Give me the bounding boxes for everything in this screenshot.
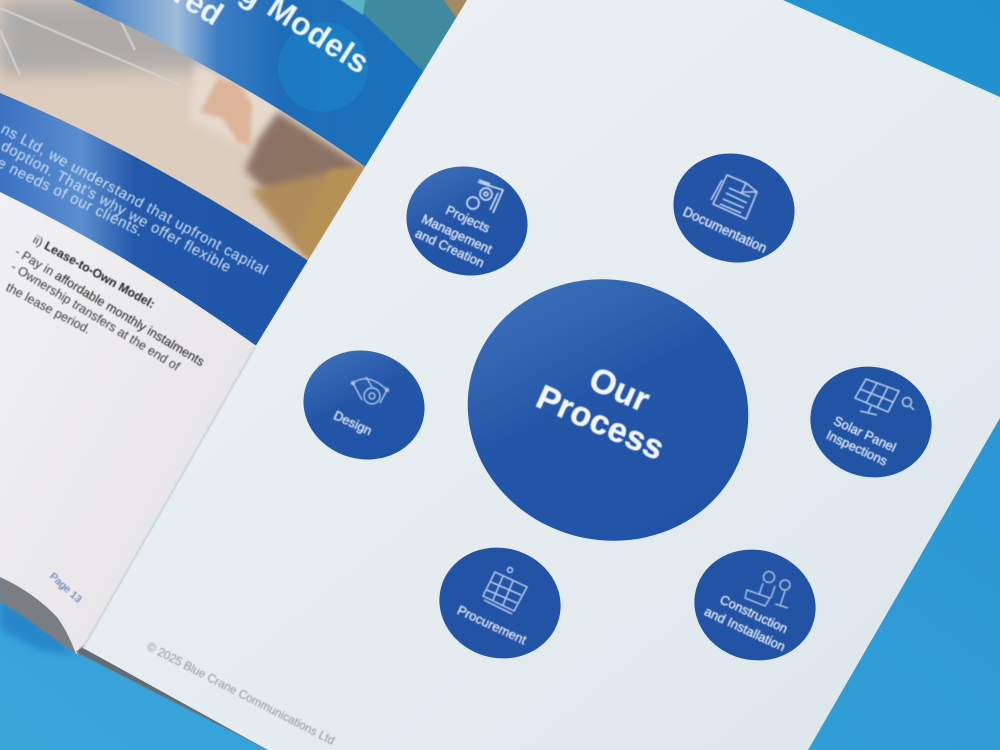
copyright line: © 2025 Blue Crane Communications Ltd <box>145 640 337 748</box>
circle: Construction and Installation <box>682 536 828 674</box>
lease-to-own list: - Pay in affordable monthly instalments <box>12 245 207 369</box>
circle: Design <box>291 337 437 473</box>
icon: gears and ruler <box>467 180 503 213</box>
label: Projects <box>443 202 493 236</box>
circle: Procurement <box>427 534 573 672</box>
lower blue band <box>0 93 310 347</box>
label <box>824 413 899 469</box>
icon: vector node <box>352 377 388 404</box>
white shirt cuff <box>192 61 278 141</box>
shadow under the left page <box>0 600 75 655</box>
icon: checklist and cart <box>483 568 527 614</box>
label: and Creation <box>413 225 487 270</box>
spine line <box>83 347 255 648</box>
circle: Documentation <box>661 140 807 276</box>
photo strip <box>0 0 366 260</box>
handshake <box>200 78 252 147</box>
label: and Installation <box>702 604 788 654</box>
central circle: Our Process <box>438 248 778 572</box>
top blue banner <box>73 0 467 167</box>
icon: document <box>711 175 757 219</box>
circle: Solar Panel Inspections <box>798 353 944 491</box>
page edge stack <box>0 577 78 655</box>
intro paragraph: doption. That's why we offer flexible <box>0 138 234 276</box>
banner heading <box>168 0 376 81</box>
page thickness shadow <box>76 645 288 750</box>
label: Construction <box>718 592 790 636</box>
teal overlay shapes <box>363 0 456 72</box>
lease-to-own list: ii) Lease-to-Own Model: <box>31 232 157 311</box>
label: Documentation <box>681 204 769 256</box>
icon: solar panel <box>855 379 914 415</box>
circle: Projects Management and Creation <box>394 153 540 289</box>
page number: Page 13 <box>47 570 84 606</box>
panel: left brochure page <box>0 0 480 655</box>
dark suit sleeve <box>242 109 365 190</box>
label <box>413 202 495 270</box>
lease-to-own list: - Ownership transfers at the end of <box>8 260 183 374</box>
label: Procurement <box>455 602 529 648</box>
intro paragraph: ns Ltd, we understand that upfront capital <box>0 121 271 279</box>
central circle: Our Process: Process <box>531 378 670 468</box>
icon: workers <box>745 572 790 608</box>
left page paper <box>0 180 262 654</box>
label: Management <box>419 211 495 257</box>
label: Design <box>331 408 374 438</box>
label: Solar Panel <box>831 413 899 455</box>
central circle: Our Process: Our <box>583 360 656 420</box>
label: Inspections <box>824 427 890 469</box>
lease-to-own list: the lease period. <box>4 280 93 337</box>
